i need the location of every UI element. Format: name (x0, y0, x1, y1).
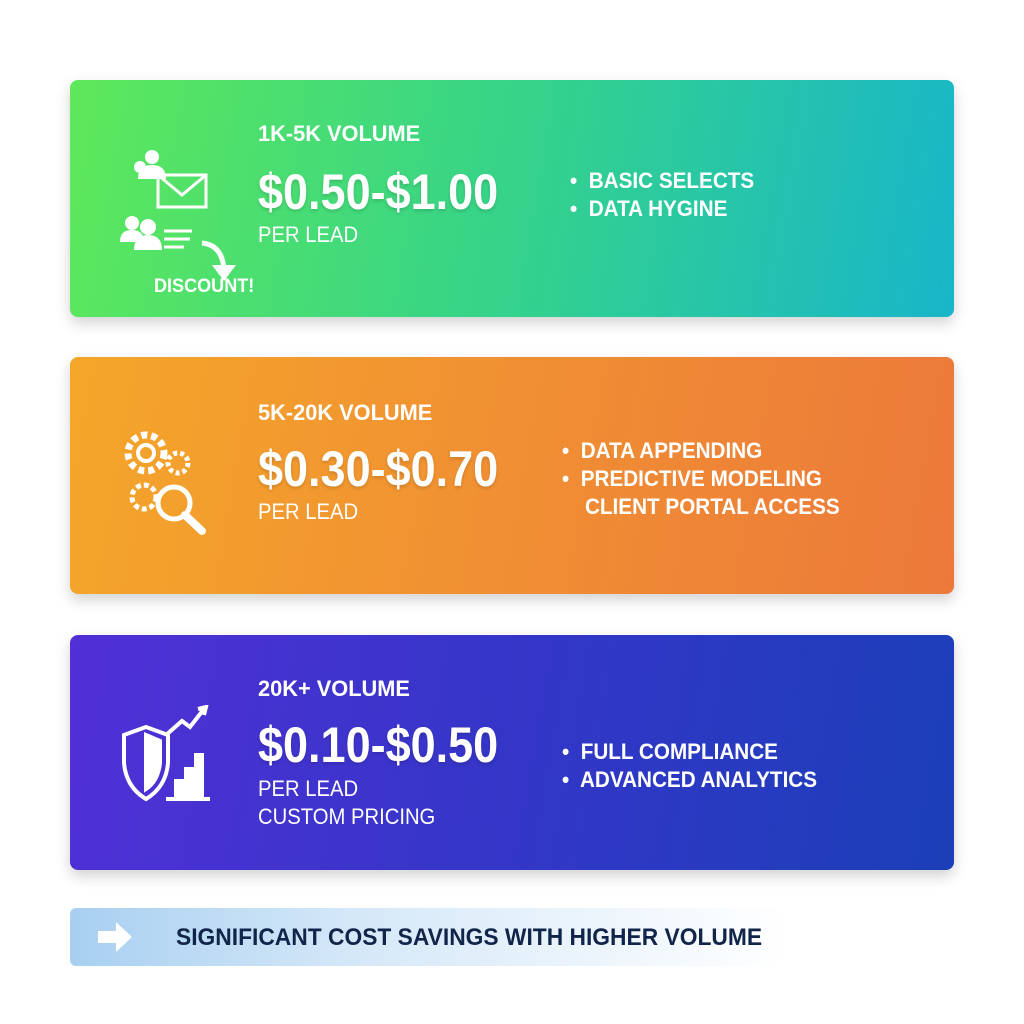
per lead and custom pricing (258, 776, 435, 829)
bullets (562, 438, 840, 519)
price: $0.50-$1.00 (258, 164, 498, 220)
per lead: PER LEAD (258, 499, 358, 524)
heading: 20k+: 20K+ VOLUME (258, 676, 410, 701)
label: discount: DISCOUNT! (154, 276, 254, 297)
icon: shield and chart (122, 705, 210, 802)
bullets (562, 739, 817, 792)
bullets: • PREDICTIVE MODELING (562, 466, 822, 491)
icon: users and envelope (120, 150, 236, 281)
bullets (570, 168, 754, 221)
bullets: CLIENT PORTAL ACCESS (585, 494, 840, 519)
bullets: • BASIC SELECTS (570, 168, 754, 193)
bullets: • DATA APPENDING (562, 438, 762, 463)
per lead and custom pricing: PER LEAD (258, 776, 358, 801)
heading: 1k-5k: 1K-5K VOLUME (258, 121, 420, 146)
icon: arrow (98, 922, 132, 952)
bullets: • DATA HYGINE (570, 196, 727, 221)
icon: gears and magnifier (124, 432, 206, 535)
callout: cost savings (70, 908, 785, 966)
bullets: • ADVANCED ANALYTICS (562, 767, 817, 792)
per lead and custom pricing: CUSTOM PRICING (258, 804, 435, 829)
callout text: SIGNIFICANT COST SAVINGS WITH HIGHER VOLUME (176, 924, 762, 951)
per lead: PER LEAD (258, 222, 358, 247)
panel: tier 3 (70, 635, 954, 870)
bullets: • FULL COMPLIANCE (562, 739, 778, 764)
price: $0.10-$0.50 (258, 717, 498, 773)
panel: tier 1 (70, 80, 954, 317)
price: $0.30-$0.70 (258, 441, 498, 497)
heading: 5k-20k: 5K-20K VOLUME (258, 400, 432, 425)
panel: tier 2 (70, 357, 954, 594)
